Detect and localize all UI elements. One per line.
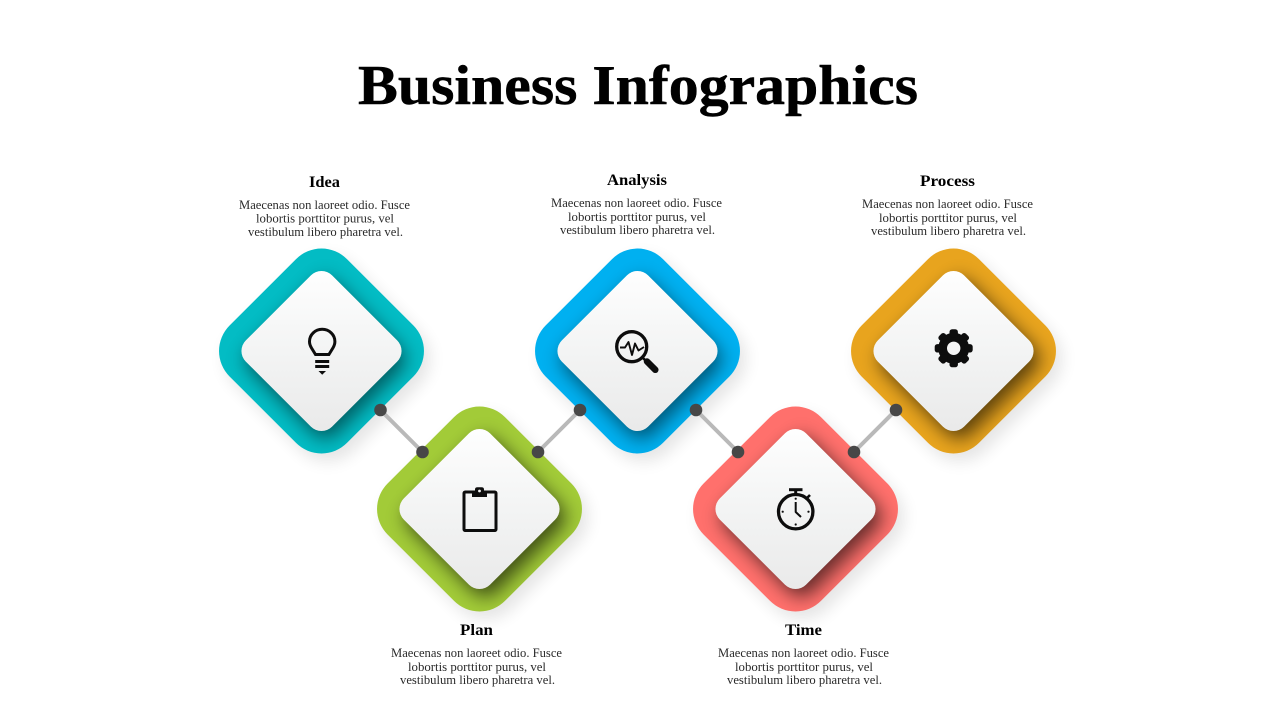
connector: idea to plan: [374, 404, 429, 458]
icon: gear: [935, 329, 973, 367]
diamond: idea: [219, 248, 432, 464]
heading: process: Process: [920, 173, 975, 190]
diamond: analysis: [535, 248, 748, 464]
connector: analysis to time: [690, 404, 744, 458]
icon: clipboard: [464, 487, 496, 530]
text block: idea: Maecenas non laoreet odio. Fusce: [239, 198, 410, 212]
text block: time: lobortis porttitor purus, vel: [735, 660, 874, 674]
text block: plan: lobortis porttitor purus, vel: [408, 660, 547, 674]
heading: plan: Plan: [460, 622, 493, 639]
text block: plan: [391, 646, 562, 687]
icon: magnifier with pulse: [617, 332, 655, 370]
heading: idea: Idea: [309, 174, 340, 191]
text block: process: lobortis porttitor purus, vel: [879, 211, 1018, 225]
connector: time to process: [848, 404, 902, 458]
panel: time: [693, 406, 906, 686]
diamond: plan: [377, 406, 590, 622]
diamond: time: [693, 406, 906, 622]
panel: idea: [219, 176, 432, 464]
text block: analysis: vestibulum libero pharetra vel.: [560, 223, 715, 237]
text block: time: [718, 646, 889, 687]
text block: idea: [239, 198, 410, 239]
icon: stopwatch: [778, 490, 813, 529]
panel: analysis: [535, 174, 748, 464]
title: Business Infographics: [358, 55, 918, 117]
text block: idea: lobortis porttitor purus, vel: [256, 212, 395, 226]
panel: plan: [377, 406, 590, 686]
text block: process: Maecenas non laoreet odio. Fusce: [862, 197, 1033, 211]
heading: time: Time: [785, 622, 822, 639]
text block: analysis: [551, 196, 722, 237]
heading: analysis: Analysis: [607, 172, 667, 189]
text block: analysis: Maecenas non laoreet odio. Fusce: [551, 196, 722, 210]
text block: plan: Maecenas non laoreet odio. Fusce: [391, 646, 562, 660]
text block: time: vestibulum libero pharetra vel.: [727, 673, 882, 687]
text block: analysis: lobortis porttitor purus, vel: [568, 210, 707, 224]
text block: time: Maecenas non laoreet odio. Fusce: [718, 646, 889, 660]
connector: plan to analysis: [532, 404, 586, 458]
diamond: process: [851, 248, 1064, 464]
text block: process: vestibulum libero pharetra vel.: [871, 224, 1026, 238]
text block: idea: vestibulum libero pharetra vel.: [248, 225, 403, 239]
panel: process: [851, 176, 1064, 464]
text block: process: [862, 197, 1033, 238]
icon: light bulb: [310, 329, 335, 375]
text block: plan: vestibulum libero pharetra vel.: [400, 673, 555, 687]
